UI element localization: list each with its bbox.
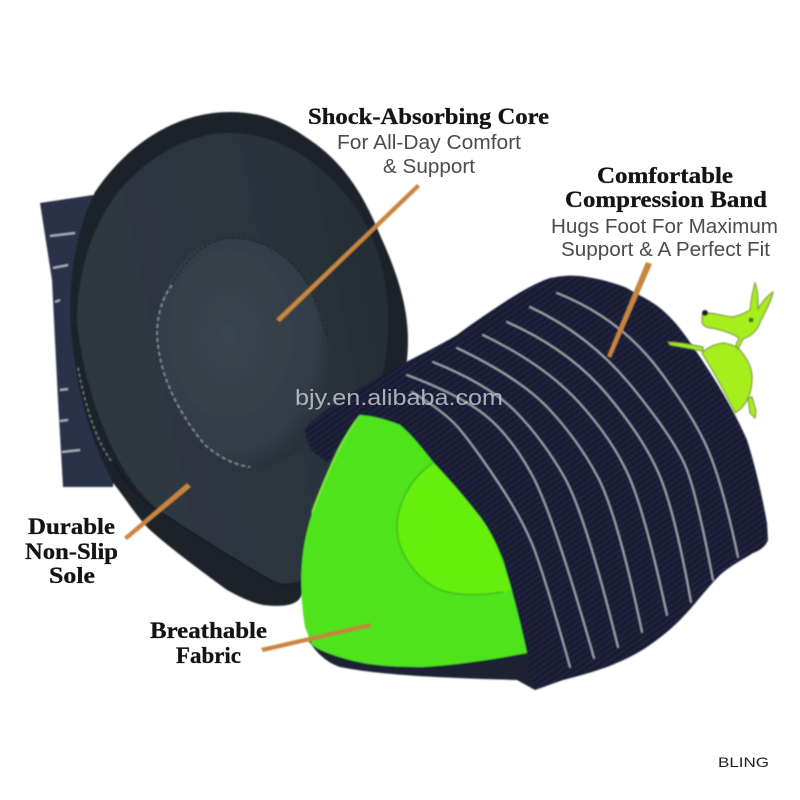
- kangaroo leg: [748, 397, 756, 418]
- subtext: shock-absorbing core: [337, 132, 521, 178]
- strap stitches: [50, 233, 80, 452]
- kangaroo logo: [668, 283, 773, 418]
- subtext: compression band: [551, 216, 778, 261]
- lining shade seam: [312, 415, 360, 513]
- left pad: sole view: [40, 112, 408, 606]
- kangaroo nose: [702, 310, 708, 316]
- rim stitching: [78, 368, 112, 462]
- breathable green lining: [301, 415, 540, 667]
- green inner dome: [397, 463, 512, 595]
- kangaroo arm: [668, 342, 703, 351]
- label: durable non-slip sole: Durable: [28, 514, 115, 539]
- band stitch lines: [407, 293, 738, 667]
- callout pointer: breathable fabric: [261, 623, 371, 652]
- pad outer rim: [70, 112, 408, 606]
- label: breathable fabric: [150, 618, 267, 668]
- heading: shock-absorbing core: Shock-Absorbing Core: [308, 104, 549, 129]
- callout pointer: compression band: [607, 262, 652, 358]
- strap behind pad: [40, 195, 120, 487]
- dark shade inside lip: [313, 408, 360, 463]
- label: durable non-slip sole: [25, 514, 118, 588]
- heading: shock-absorbing core: [308, 104, 549, 178]
- core dome: [159, 238, 328, 467]
- watermark: bjy.en.alibaba.com: [295, 385, 503, 410]
- label: durable non-slip sole: Non-Slip: [25, 539, 118, 564]
- label: breathable fabric: Fabric: [176, 643, 241, 668]
- kangaroo head, neck and ears: [702, 283, 773, 349]
- subtext: compression band: Hugs Foot For Maximum: [551, 216, 778, 238]
- rim seam: [113, 462, 295, 584]
- pad inner surface: [77, 133, 388, 584]
- kangaroo body: [702, 343, 752, 413]
- subtext: shock-absorbing core: For All-Day Comfort: [337, 132, 521, 154]
- heading: comfortable compression band: [551, 163, 778, 261]
- right pad: compression band: [301, 276, 768, 690]
- core stitching: [157, 285, 250, 467]
- subtext: shock-absorbing core: & Support: [383, 156, 475, 178]
- brand label: BLING: [718, 754, 769, 770]
- band shape: [305, 276, 768, 690]
- lower sole edge: [308, 640, 545, 690]
- callout pointer: durable sole: [124, 483, 191, 540]
- callout pointer: shock-absorbing core: [276, 184, 420, 322]
- heading: comfortable compression band: Comfortable: [597, 163, 733, 188]
- subtext: compression band: Support & A Perfect Fit: [561, 239, 770, 261]
- heading: comfortable compression band: Compression Band: [565, 187, 767, 212]
- label: breathable fabric: Breathable: [150, 618, 267, 643]
- kangaroo eye: [748, 318, 754, 322]
- label: durable non-slip sole: Sole: [49, 563, 95, 588]
